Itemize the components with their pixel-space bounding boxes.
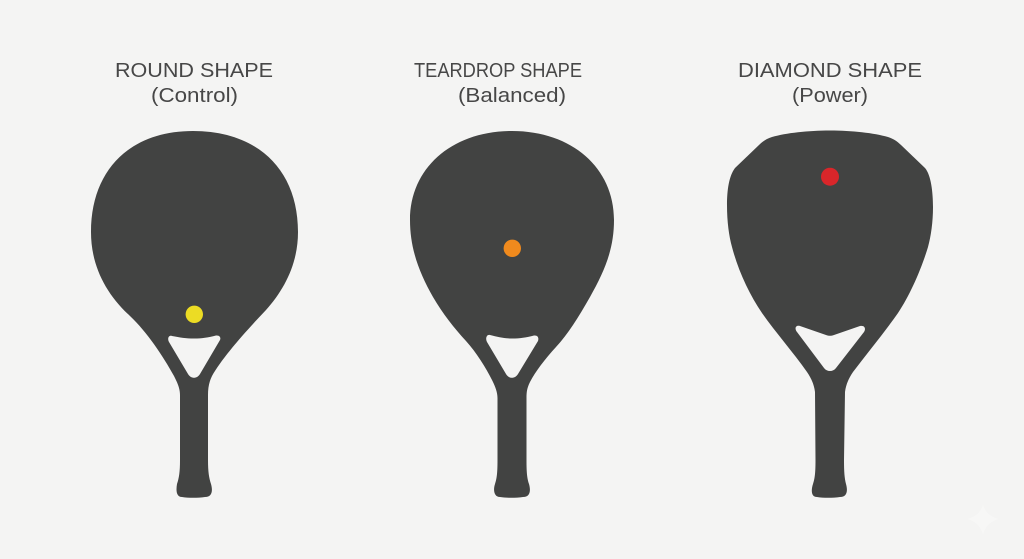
racket: round	[91, 131, 298, 498]
heading: teardrop shape: (Balanced)	[458, 85, 566, 107]
icon: faint sparkle watermark	[968, 505, 998, 534]
panel: teardrop shape	[410, 60, 614, 498]
heading: round shape	[115, 60, 273, 107]
heading: diamond shape	[738, 60, 922, 107]
heading: diamond shape: (Power)	[792, 85, 868, 107]
racket: teardrop	[410, 131, 614, 498]
panel: diamond shape	[727, 60, 933, 498]
heading: teardrop shape: TEARDROP SHAPE	[414, 60, 582, 82]
sweet spot: red dot	[821, 168, 839, 186]
racket: diamond	[727, 130, 933, 498]
heading: round shape: ROUND SHAPE	[115, 60, 273, 82]
sweet spot: orange dot	[504, 240, 521, 257]
heading: teardrop shape	[414, 60, 582, 107]
sweet spot: yellow dot	[186, 306, 203, 323]
heading: round shape: (Control)	[151, 85, 238, 107]
panel: round shape	[91, 60, 298, 498]
heading: diamond shape: DIAMOND SHAPE	[738, 60, 922, 82]
